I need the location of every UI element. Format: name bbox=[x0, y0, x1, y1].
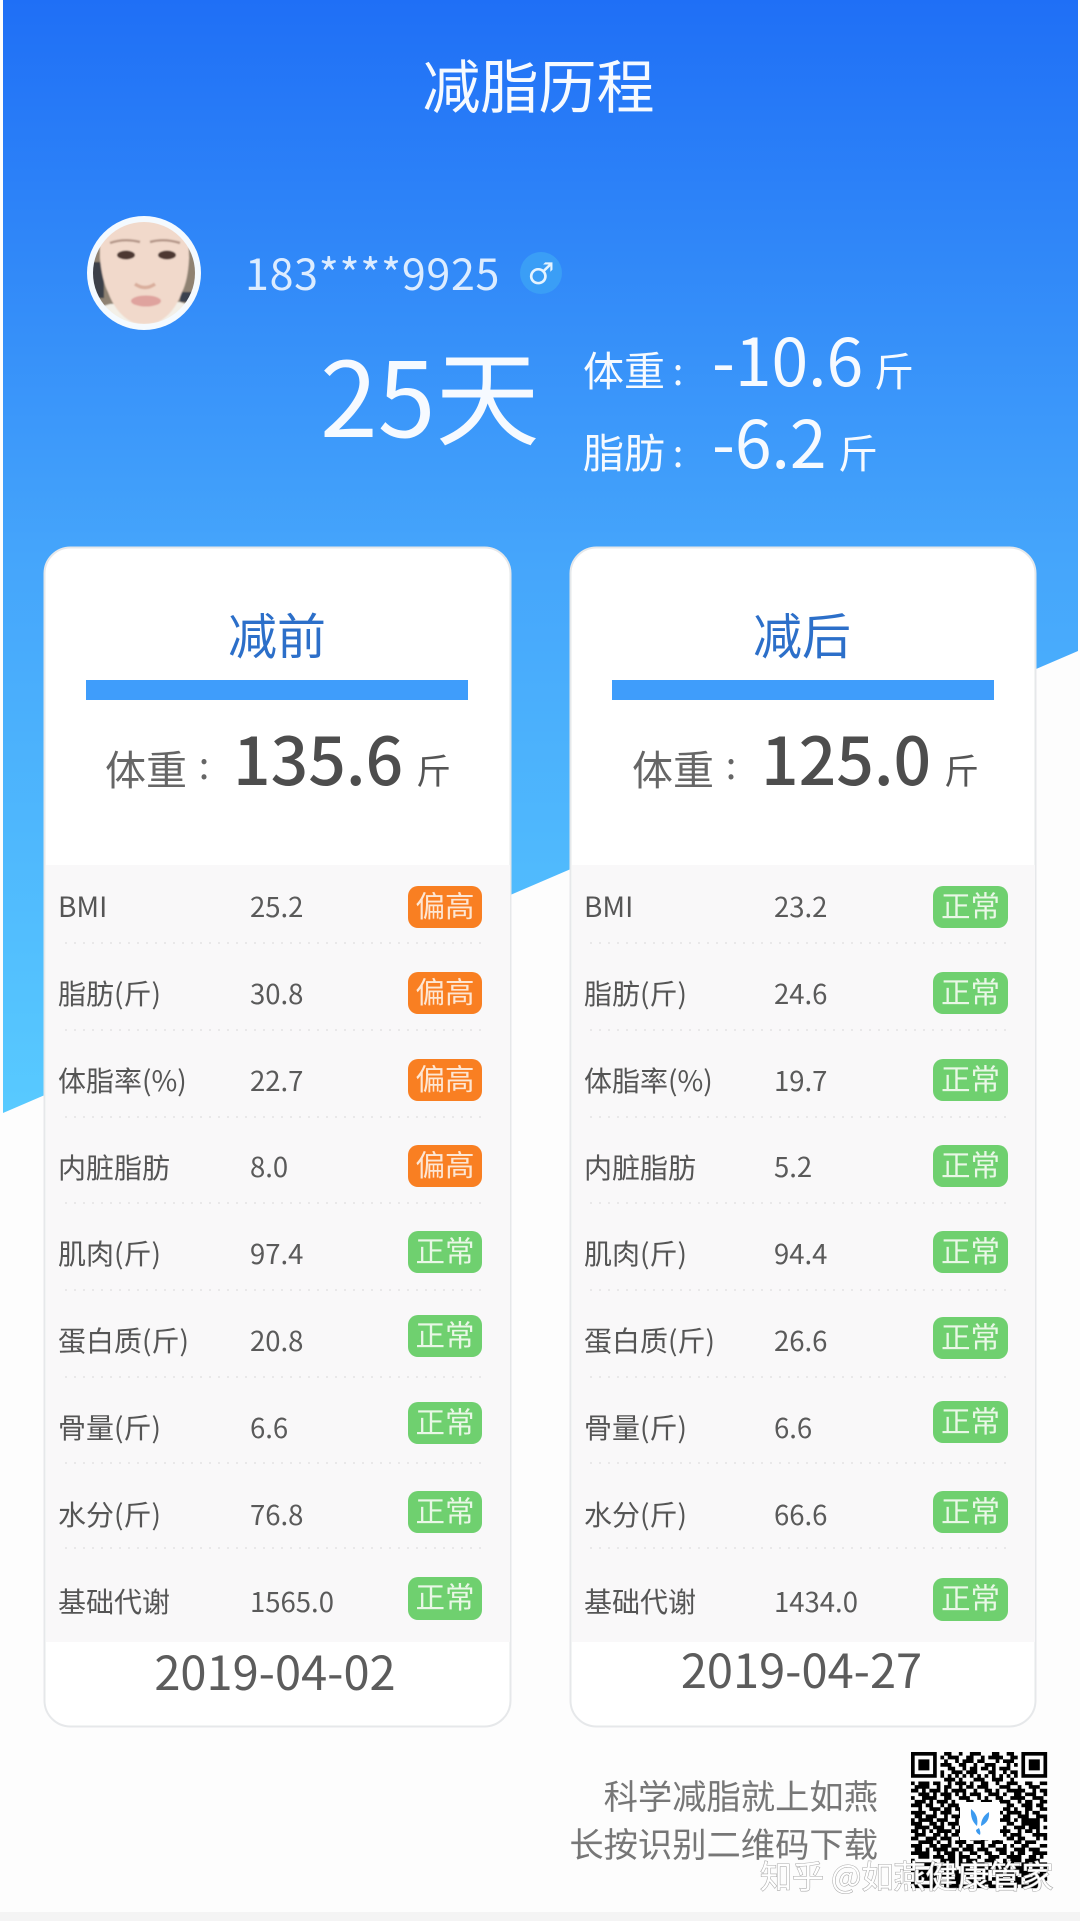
fat change: : bbox=[673, 423, 683, 478]
row: BMI: 偏高 bbox=[415, 884, 475, 926]
bottom strip bbox=[0, 1912, 1080, 1921]
fat change: 脂肪 bbox=[583, 420, 665, 480]
row: fat: 正常 bbox=[941, 970, 1000, 1012]
row: basal metabolism: 1434.0 bbox=[774, 1580, 858, 1620]
card background bbox=[570, 548, 1036, 1726]
heading: after: 减后 bbox=[753, 598, 851, 669]
date before: 2019-04-02 bbox=[154, 1635, 396, 1704]
weight change: 斤 bbox=[874, 340, 914, 398]
row: visceral fat: 内脏脂肪 bbox=[58, 1147, 170, 1187]
weight after: : bbox=[726, 735, 736, 790]
footer text bbox=[569, 1769, 878, 1867]
row: muscle: 正常 bbox=[415, 1229, 475, 1271]
row: fat bbox=[58, 970, 482, 1014]
row: muscle bbox=[584, 1229, 1008, 1273]
row: muscle bbox=[58, 1229, 482, 1273]
row: basal metabolism bbox=[58, 1575, 482, 1621]
weight after: 斤 bbox=[944, 744, 979, 795]
row: BMI bbox=[584, 884, 1008, 928]
row: bone mass: 6.6 bbox=[774, 1406, 812, 1446]
row: protein: 正常 bbox=[415, 1313, 475, 1355]
panel: after bbox=[570, 548, 1036, 1726]
row: fat bbox=[584, 970, 1008, 1014]
title: 减脂历程 bbox=[422, 41, 655, 125]
card background bbox=[44, 548, 510, 1726]
row: water: 水分(斤) bbox=[584, 1494, 687, 1534]
blue gradient background bbox=[3, 0, 1078, 1113]
days count: 25天 bbox=[320, 316, 539, 467]
row: BMI: 23.2 bbox=[774, 885, 827, 925]
row: water: 76.8 bbox=[250, 1493, 303, 1533]
row: BMI bbox=[58, 884, 482, 928]
weight after: 125.0 bbox=[761, 709, 931, 805]
row: basal metabolism: 基础代谢 bbox=[584, 1581, 696, 1621]
weight before: : bbox=[199, 735, 209, 790]
row: water: 正常 bbox=[415, 1489, 475, 1531]
fat change bbox=[583, 392, 878, 488]
row: fat: 24.6 bbox=[774, 972, 827, 1012]
icon: male gender bbox=[520, 252, 562, 294]
watermark: 知乎 @如燕健康管家 bbox=[760, 1852, 1053, 1898]
row: protein: 26.6 bbox=[774, 1319, 827, 1359]
row: visceral fat bbox=[58, 1143, 482, 1187]
metrics table background bbox=[46, 865, 510, 1642]
weight change bbox=[583, 310, 914, 406]
row: fat: 脂肪(斤) bbox=[584, 973, 687, 1013]
weight after: 体重 bbox=[632, 737, 714, 797]
heading bar bbox=[86, 680, 468, 700]
avatar bbox=[87, 216, 201, 330]
phone number: 183****9925 bbox=[245, 241, 500, 303]
row: visceral fat: 内脏脂肪 bbox=[584, 1147, 696, 1187]
row: water: 正常 bbox=[941, 1489, 1000, 1531]
panel: before bbox=[44, 548, 510, 1726]
row: protein: 蛋白质(斤) bbox=[58, 1320, 189, 1360]
row: body fat rate: 体脂率(%) bbox=[584, 1060, 713, 1100]
row: water: 66.6 bbox=[774, 1493, 827, 1533]
weight change: 体重 bbox=[583, 338, 665, 398]
row: muscle: 正常 bbox=[941, 1229, 1000, 1271]
row: BMI: BMI bbox=[584, 886, 633, 926]
fat change: -6.2 bbox=[712, 392, 827, 488]
row: body fat rate bbox=[58, 1057, 482, 1101]
row: protein bbox=[58, 1313, 482, 1360]
row: water bbox=[58, 1489, 482, 1534]
row: protein: 蛋白质(斤) bbox=[584, 1320, 715, 1360]
row: fat: 30.8 bbox=[250, 972, 303, 1012]
footer text: 科学减脂就上如燕 bbox=[604, 1769, 878, 1819]
row: muscle: 肌肉(斤) bbox=[58, 1233, 161, 1273]
row: body fat rate: 22.7 bbox=[250, 1059, 303, 1099]
row: body fat rate: 体脂率(%) bbox=[58, 1060, 187, 1100]
fat change: 斤 bbox=[838, 422, 878, 480]
footer text: 长按识别二维码下载 bbox=[569, 1817, 878, 1867]
date after: 2019-04-27 bbox=[681, 1633, 922, 1702]
row: visceral fat: 5.2 bbox=[774, 1145, 812, 1185]
row: protein: 20.8 bbox=[250, 1319, 303, 1359]
row: water bbox=[584, 1489, 1008, 1534]
row: bone mass: 正常 bbox=[415, 1400, 475, 1442]
weight after bbox=[632, 709, 979, 805]
row: visceral fat: 正常 bbox=[941, 1143, 1000, 1185]
row: bone mass: 骨量(斤) bbox=[584, 1407, 687, 1447]
weight before bbox=[105, 709, 451, 805]
row: muscle: 肌肉(斤) bbox=[584, 1233, 687, 1273]
weight before: 斤 bbox=[416, 744, 451, 795]
row: BMI: 25.2 bbox=[250, 885, 303, 925]
row: body fat rate: 正常 bbox=[941, 1057, 1000, 1099]
QR logo bbox=[960, 1802, 1000, 1840]
row: visceral fat: 偏高 bbox=[415, 1143, 475, 1185]
row: basal metabolism: 基础代谢 bbox=[58, 1581, 170, 1621]
row: body fat rate bbox=[584, 1057, 1008, 1101]
metrics table background bbox=[572, 865, 1035, 1642]
row: fat: 脂肪(斤) bbox=[58, 973, 161, 1013]
row: visceral fat: 8.0 bbox=[250, 1145, 288, 1185]
row: bone mass: 骨量(斤) bbox=[58, 1407, 161, 1447]
row: protein: 正常 bbox=[941, 1315, 1000, 1357]
heading: before: 减前 bbox=[228, 598, 326, 669]
QR code bbox=[911, 1754, 1047, 1886]
heading bar bbox=[612, 680, 994, 700]
weight before: 135.6 bbox=[233, 709, 403, 805]
icon: male gender: ♂ bbox=[528, 257, 554, 292]
weight change: : bbox=[673, 341, 683, 396]
row: basal metabolism: 正常 bbox=[941, 1576, 1000, 1618]
row: visceral fat bbox=[584, 1143, 1008, 1187]
row: water: 水分(斤) bbox=[58, 1494, 161, 1534]
weight change: -10.6 bbox=[712, 310, 863, 406]
row: fat: 偏高 bbox=[415, 970, 475, 1012]
row: muscle: 97.4 bbox=[250, 1232, 303, 1272]
row: body fat rate: 19.7 bbox=[774, 1059, 827, 1099]
row: bone mass bbox=[584, 1399, 1008, 1447]
row: basal metabolism bbox=[584, 1576, 1008, 1621]
row: muscle: 94.4 bbox=[774, 1232, 827, 1272]
row: BMI: 正常 bbox=[941, 884, 1000, 926]
row: bone mass: 6.6 bbox=[250, 1406, 288, 1446]
row: body fat rate: 偏高 bbox=[415, 1057, 475, 1099]
row: basal metabolism: 1565.0 bbox=[250, 1580, 334, 1620]
row: bone mass: 正常 bbox=[941, 1399, 1000, 1441]
row: BMI: BMI bbox=[58, 886, 107, 926]
row: bone mass bbox=[58, 1400, 482, 1447]
row: basal metabolism: 正常 bbox=[415, 1575, 475, 1617]
row: protein bbox=[584, 1315, 1008, 1360]
weight before: 体重 bbox=[105, 737, 187, 797]
